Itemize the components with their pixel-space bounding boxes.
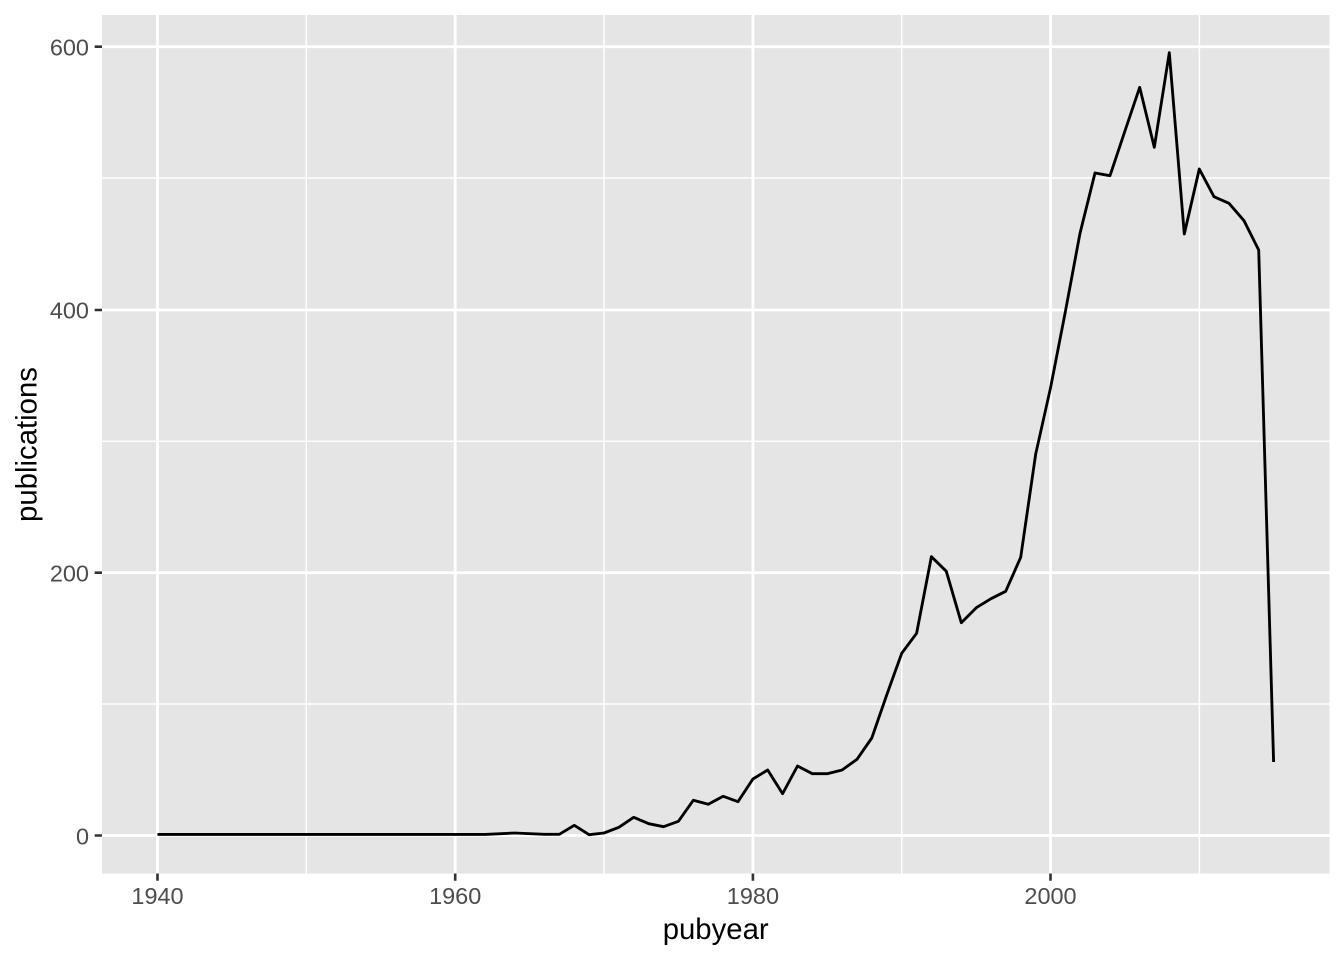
data line: publications per year, 1940 to 2015: [158, 53, 1274, 835]
x axis labels: [131, 883, 1077, 909]
x axis labels: 1980: [727, 883, 779, 909]
y axis labels: 0: [76, 824, 89, 850]
x axis labels: 1940: [131, 883, 184, 909]
y axis labels: 200: [50, 560, 89, 586]
y axis labels: 600: [50, 34, 89, 60]
y axis labels: [50, 34, 89, 850]
x axis labels: 2000: [1024, 883, 1077, 909]
x axis title: pubyear: [663, 913, 769, 946]
y axis title: publications: [10, 367, 44, 522]
x axis ticks: [158, 874, 1050, 881]
x axis labels: 1960: [429, 883, 481, 909]
y axis ticks: [95, 47, 102, 835]
y axis labels: 400: [50, 298, 89, 324]
